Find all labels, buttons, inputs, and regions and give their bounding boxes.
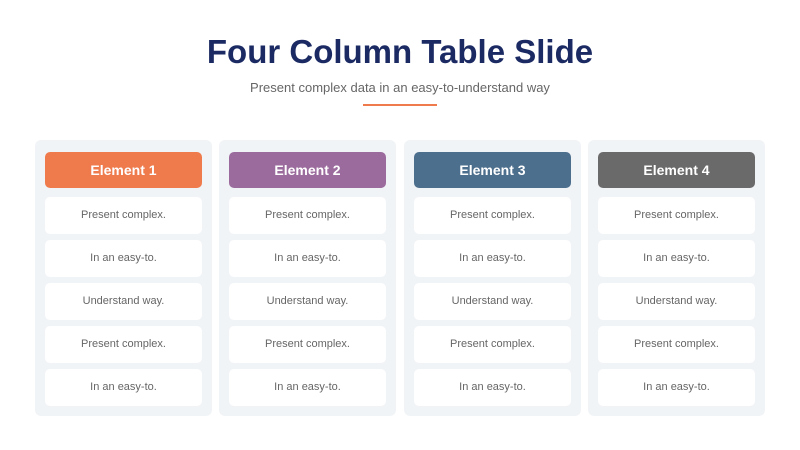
cell: Present complex. bbox=[265, 338, 350, 350]
cell: Present complex. bbox=[265, 209, 350, 221]
cell bbox=[229, 326, 386, 363]
header: Element 3 bbox=[414, 152, 571, 188]
cell: Understand way. bbox=[636, 295, 717, 307]
header: Element 4: Element 4 bbox=[643, 162, 710, 178]
cell bbox=[414, 197, 571, 234]
panel: column 4 bbox=[588, 140, 765, 416]
cell bbox=[598, 326, 755, 363]
cell: In an easy-to. bbox=[643, 381, 710, 393]
cell bbox=[45, 283, 202, 320]
cell bbox=[414, 326, 571, 363]
cell: In an easy-to. bbox=[90, 381, 157, 393]
panel: column 3 bbox=[404, 140, 581, 416]
cell: Present complex. bbox=[81, 209, 166, 221]
header: Element 1: Element 1 bbox=[90, 162, 157, 178]
cell bbox=[598, 283, 755, 320]
cell: In an easy-to. bbox=[459, 252, 526, 264]
panel: column 2 bbox=[219, 140, 396, 416]
cell bbox=[45, 240, 202, 277]
cell: Understand way. bbox=[452, 295, 533, 307]
cell bbox=[598, 240, 755, 277]
cell bbox=[45, 326, 202, 363]
cell bbox=[414, 283, 571, 320]
cell bbox=[229, 283, 386, 320]
cell bbox=[45, 369, 202, 406]
subtitle: Present complex data in an easy-to-understand way bbox=[250, 80, 550, 95]
cell: In an easy-to. bbox=[643, 252, 710, 264]
cell bbox=[229, 369, 386, 406]
title: Four Column Table Slide bbox=[207, 33, 593, 70]
header: Element 2 bbox=[229, 152, 386, 188]
cell: Present complex. bbox=[634, 209, 719, 221]
cell bbox=[45, 197, 202, 234]
cell: In an easy-to. bbox=[90, 252, 157, 264]
cell: Understand way. bbox=[83, 295, 164, 307]
cell: Present complex. bbox=[450, 338, 535, 350]
cell: Present complex. bbox=[81, 338, 166, 350]
header: Element 3: Element 3 bbox=[459, 162, 526, 178]
cell: In an easy-to. bbox=[274, 381, 341, 393]
cell: Present complex. bbox=[450, 209, 535, 221]
cell bbox=[414, 240, 571, 277]
cell bbox=[598, 369, 755, 406]
cell bbox=[414, 369, 571, 406]
cell: In an easy-to. bbox=[274, 252, 341, 264]
cell: In an easy-to. bbox=[459, 381, 526, 393]
cell bbox=[229, 240, 386, 277]
header: Element 4 bbox=[598, 152, 755, 188]
accent line bbox=[363, 104, 437, 106]
header: Element 2: Element 2 bbox=[274, 162, 341, 178]
cell bbox=[229, 197, 386, 234]
cell: Present complex. bbox=[634, 338, 719, 350]
cell: Understand way. bbox=[267, 295, 348, 307]
cell bbox=[598, 197, 755, 234]
panel: column 1 bbox=[35, 140, 212, 416]
header: Element 1 bbox=[45, 152, 202, 188]
